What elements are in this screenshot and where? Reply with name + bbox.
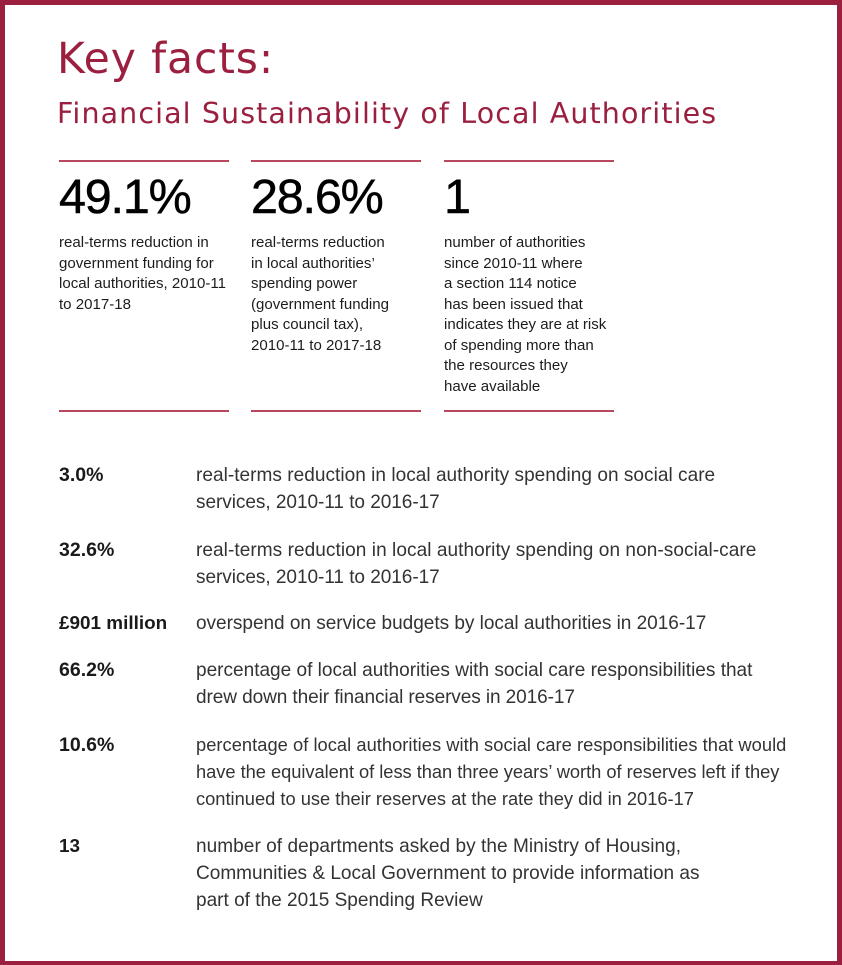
- fact row: 32.6%: 32.6%: [59, 539, 114, 561]
- stat number: 49.1%: [59, 170, 191, 224]
- stat description: has been issued that: [444, 296, 583, 312]
- fact row: £901 million: overspend on service budgets by local authorities in 2016-17: [196, 613, 706, 634]
- stat description: since 2010-11 where: [444, 254, 583, 272]
- fact row: 3.0%: services, 2010-11 to 2016-17: [196, 492, 440, 513]
- stat description: a section 114 notice: [444, 275, 577, 292]
- title: Key facts:: [57, 35, 274, 84]
- stat description: real-terms reduction in: [59, 234, 209, 251]
- stat description: local authorities, 2010-11: [59, 275, 226, 292]
- fact row: 66.2%: [59, 659, 752, 708]
- panel: stat 28.6%: [251, 160, 421, 412]
- fact row: 10.6%: have the equivalent of less than three years’ worth of reserves left if they: [196, 761, 779, 782]
- stat description: spending power: [251, 275, 357, 292]
- fact row: 13: part of the 2015 Spending Review: [196, 890, 483, 911]
- stat description: plus council tax),: [251, 316, 363, 333]
- stat description: of spending more than: [444, 336, 594, 354]
- subtitle: Financial Sustainability of Local Authorities: [57, 97, 717, 130]
- stat description: indicates they are at risk: [444, 316, 606, 333]
- stat description: [59, 234, 226, 312]
- fact row: 32.6%: services, 2010-11 to 2016-17: [196, 567, 440, 588]
- stat description: (government funding: [251, 296, 389, 312]
- stat number: 1: [444, 170, 470, 224]
- panel: stat 49.1%: [59, 160, 229, 412]
- stat description: 2010-11 to 2017-18: [251, 336, 381, 354]
- stat description: in local authorities’: [251, 254, 375, 272]
- fact row: 32.6%: real-terms reduction in local authority spending on non-social-care: [196, 540, 756, 561]
- stat description: number of authorities: [444, 234, 585, 251]
- stat description: the resources they: [444, 357, 568, 374]
- fact row: 13: Communities & Local Government to provide information as: [196, 863, 700, 884]
- fact row: 13: number of departments asked by the Ministry of Housing,: [196, 836, 681, 857]
- fact row: 10.6%: 10.6%: [59, 734, 114, 756]
- fact row: 3.0%: real-terms reduction in local authority spending on social care: [196, 465, 715, 486]
- fact row: 66.2%: percentage of local authorities with social care responsibilities that: [196, 660, 752, 681]
- fact row: 10.6%: [59, 734, 786, 809]
- stat number: 28.6%: [251, 170, 383, 224]
- stat description: to 2017-18: [59, 296, 131, 312]
- stat description: [251, 234, 389, 354]
- fact row: 66.2%: drew down their financial reserves in 2016-17: [196, 687, 575, 708]
- panel: stat 1: [444, 160, 614, 412]
- fact row: 13: 13: [59, 836, 80, 857]
- fact row: £901 million: £901 million: [59, 613, 167, 634]
- stat description: [444, 234, 606, 394]
- stat description: real-terms reduction: [251, 234, 385, 251]
- fact row: 3.0%: 3.0%: [59, 464, 103, 486]
- fact row: 10.6%: continued to use their reserves at the rate they did in 2016-17: [196, 788, 694, 809]
- fact row: 32.6%: [59, 539, 756, 588]
- fact row: 3.0%: [59, 464, 715, 513]
- stat description: government funding for: [59, 254, 214, 272]
- stat description: have available: [444, 378, 540, 394]
- fact row: 13: [59, 836, 700, 911]
- fact row: 10.6%: percentage of local authorities with social care responsibilities that would: [196, 734, 786, 755]
- fact row: 66.2%: 66.2%: [59, 659, 114, 681]
